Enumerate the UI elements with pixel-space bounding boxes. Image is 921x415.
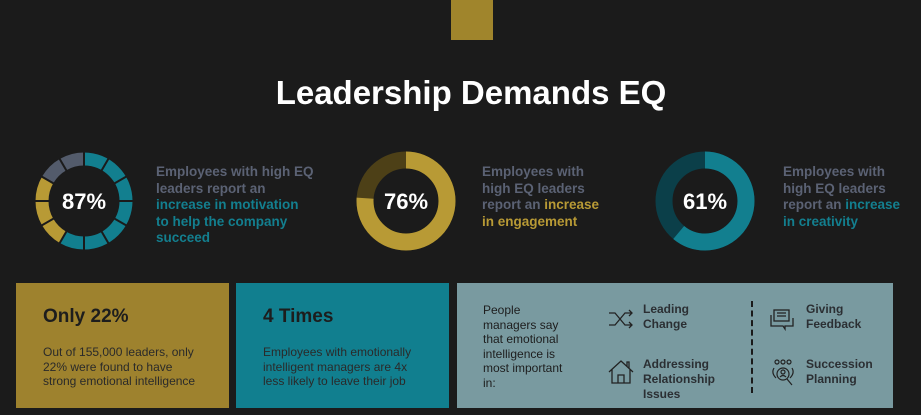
item: leading change <box>643 302 689 331</box>
item: giving feedback: Feedback <box>806 317 861 331</box>
text: engagement: Employees with <box>482 164 584 179</box>
panel: 4 times: intelligent managers are 4x <box>263 360 407 374</box>
intro text: that emotional <box>483 332 558 346</box>
text: motivation: leaders report an <box>156 181 266 196</box>
item: giving feedback: Giving <box>806 302 843 316</box>
donut 1: 87%: 87% <box>62 189 106 214</box>
donut 3: 61%: 61% <box>683 189 727 214</box>
text: engagement <box>482 164 599 229</box>
item: relationship issues <box>643 357 715 401</box>
panel: only 22%: Only 22% <box>43 306 129 327</box>
text: engagement: high EQ leaders <box>482 181 585 196</box>
text: motivation: to help the company <box>156 214 287 229</box>
text: creativity: Employees with <box>783 164 885 179</box>
intro text: People <box>483 303 520 317</box>
intro text <box>483 303 562 390</box>
icon: house <box>608 360 634 384</box>
item: leading change: Change <box>643 317 687 331</box>
text: engagement: report an increase <box>482 197 599 212</box>
text: creativity <box>783 164 900 229</box>
text: motivation: succeed <box>156 230 210 245</box>
item: relationship issues: Addressing <box>643 357 709 371</box>
item: giving feedback <box>806 302 862 331</box>
item: succession planning: Succession <box>806 357 873 371</box>
text: motivation: Employees with high EQ <box>156 164 314 179</box>
panel: 4 times: less likely to leave their job <box>263 374 406 388</box>
text: motivation: increase in motivation <box>156 197 299 212</box>
intro text: in: <box>483 376 496 390</box>
text: creativity: high EQ leaders <box>783 181 886 196</box>
icon: chat feedback <box>770 309 794 331</box>
icon: shuffle <box>609 310 633 328</box>
text: creativity: in creativity <box>783 214 858 229</box>
text: creativity: report an increase <box>783 197 900 212</box>
item: succession planning: Planning <box>806 372 857 386</box>
title: Leadership Demands EQ <box>276 74 666 111</box>
decorative gold tab <box>451 0 493 40</box>
donut 1: 87% <box>36 152 132 250</box>
intro text: most important <box>483 361 562 375</box>
intro text: intelligence is <box>483 346 555 360</box>
panel: only 22%: 22% were found to have <box>43 360 172 374</box>
icon: succession <box>772 359 794 386</box>
item: relationship issues: Issues <box>643 387 680 401</box>
panel: 4 times: Employees with emotionally <box>263 345 411 359</box>
text: engagement: in engagement <box>482 214 577 229</box>
item: succession planning <box>806 357 873 386</box>
donut 2: 76% <box>356 152 456 250</box>
text: motivation <box>156 164 314 245</box>
donut 3: 61% <box>656 152 754 250</box>
item: leading change: Leading <box>643 302 689 316</box>
divider dashed <box>751 301 753 393</box>
item: relationship issues: Relationship <box>643 372 715 386</box>
intro text: managers say <box>483 318 558 332</box>
panel: only 22%: strong emotional intelligence <box>43 374 195 388</box>
donut 2: 76%: 76% <box>384 189 428 214</box>
panel: only 22%: Out of 155,000 leaders, only <box>43 345 194 359</box>
panel: most important areas <box>457 283 893 408</box>
panel: only 22% <box>16 283 229 408</box>
panel: 4 times <box>236 283 449 408</box>
panel: 4 times: 4 Times <box>263 306 333 327</box>
